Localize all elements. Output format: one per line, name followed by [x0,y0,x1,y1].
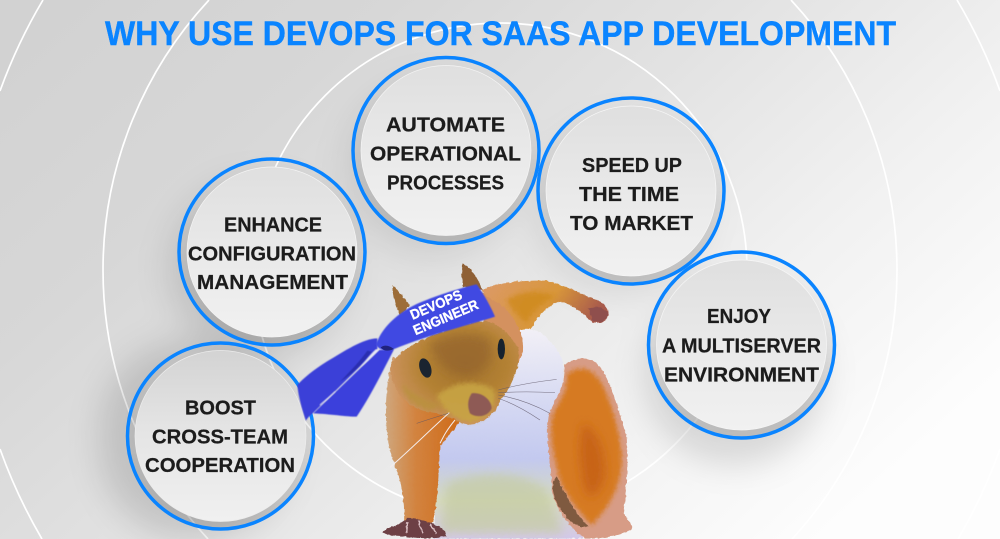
tail upper [297,338,377,421]
headband knot [381,346,394,351]
arm inner shading [507,292,555,323]
left ear [393,285,410,316]
label: boost cross-team cooperation [145,396,295,477]
label: automate operational processes: PROCESSES [387,172,504,194]
dark whiskers [417,379,557,423]
label: enjoy a multiserver environment [662,305,821,386]
label: enhance configuration management: CONFIGURATION [188,242,356,266]
right eye [498,339,505,359]
label: automate operational processes [370,114,521,194]
haunch outer rim [547,358,632,539]
cheek [402,383,443,411]
label: speed up the time to market: SPEED UP [582,154,682,177]
haunch deep fur [580,423,605,496]
panel: enhance configuration management [179,159,365,345]
left eye [417,357,434,379]
squirrel mascot with headband [297,263,632,539]
torso [433,329,583,539]
label: enhance configuration management: ENHANCE [224,214,322,236]
ribbon highlight [320,392,335,405]
panel: enjoy a multiserver environment [648,252,834,438]
whiskers [390,413,455,467]
headband [376,284,495,350]
label: enjoy a multiserver environment: ENVIRONMENT [664,364,819,386]
ribbon gap [361,349,379,367]
label: boost cross-team cooperation: BOOST [185,396,256,420]
circle shadows [100,80,825,539]
paw tip [588,307,608,322]
forehead shade [430,334,492,377]
label: automate operational processes: AUTOMATE [386,114,505,136]
right ear [462,263,483,290]
neck [480,292,523,393]
squirrel body [383,263,632,539]
label: boost cross-team cooperation: COOPERATION [145,454,295,477]
label: boost cross-team cooperation: CROSS-TEAM [152,426,288,448]
label: enjoy a multiserver environment: ENJOY [707,305,771,328]
panel: speed up the time to market [538,98,724,284]
label: enhance configuration management [188,214,356,294]
ribbon fold [340,351,372,382]
muzzle [437,383,495,422]
headband label: DEVOPS [408,286,464,323]
headband label [405,282,481,338]
label: speed up the time to market: THE TIME [579,183,679,206]
label: speed up the time to market [570,154,693,235]
left arm [386,357,461,527]
label: automate operational processes: OPERATIONAL [370,142,521,166]
title: WHY USE DEVOPS FOR SAAS APP DEVELOPMENT [105,15,896,53]
panel: automate operational processes [353,58,539,244]
headband tails [297,338,394,421]
head [390,321,519,425]
front paw [383,518,446,538]
headband label: ENGINEER [411,296,481,338]
haunch orange fur [551,369,622,525]
label: speed up the time to market: TO MARKET [570,212,693,235]
label: enjoy a multiserver environment: A MULTISERVER [662,334,821,358]
raised arm [482,281,609,333]
paw claws [407,521,437,533]
haunch dark underside [553,477,588,527]
panel: boost cross-team cooperation [128,343,314,529]
torso lower shade [440,474,563,533]
label: enhance configuration management: MANAGEMENT [197,271,348,294]
tail lower [313,349,394,417]
nose [468,393,492,416]
